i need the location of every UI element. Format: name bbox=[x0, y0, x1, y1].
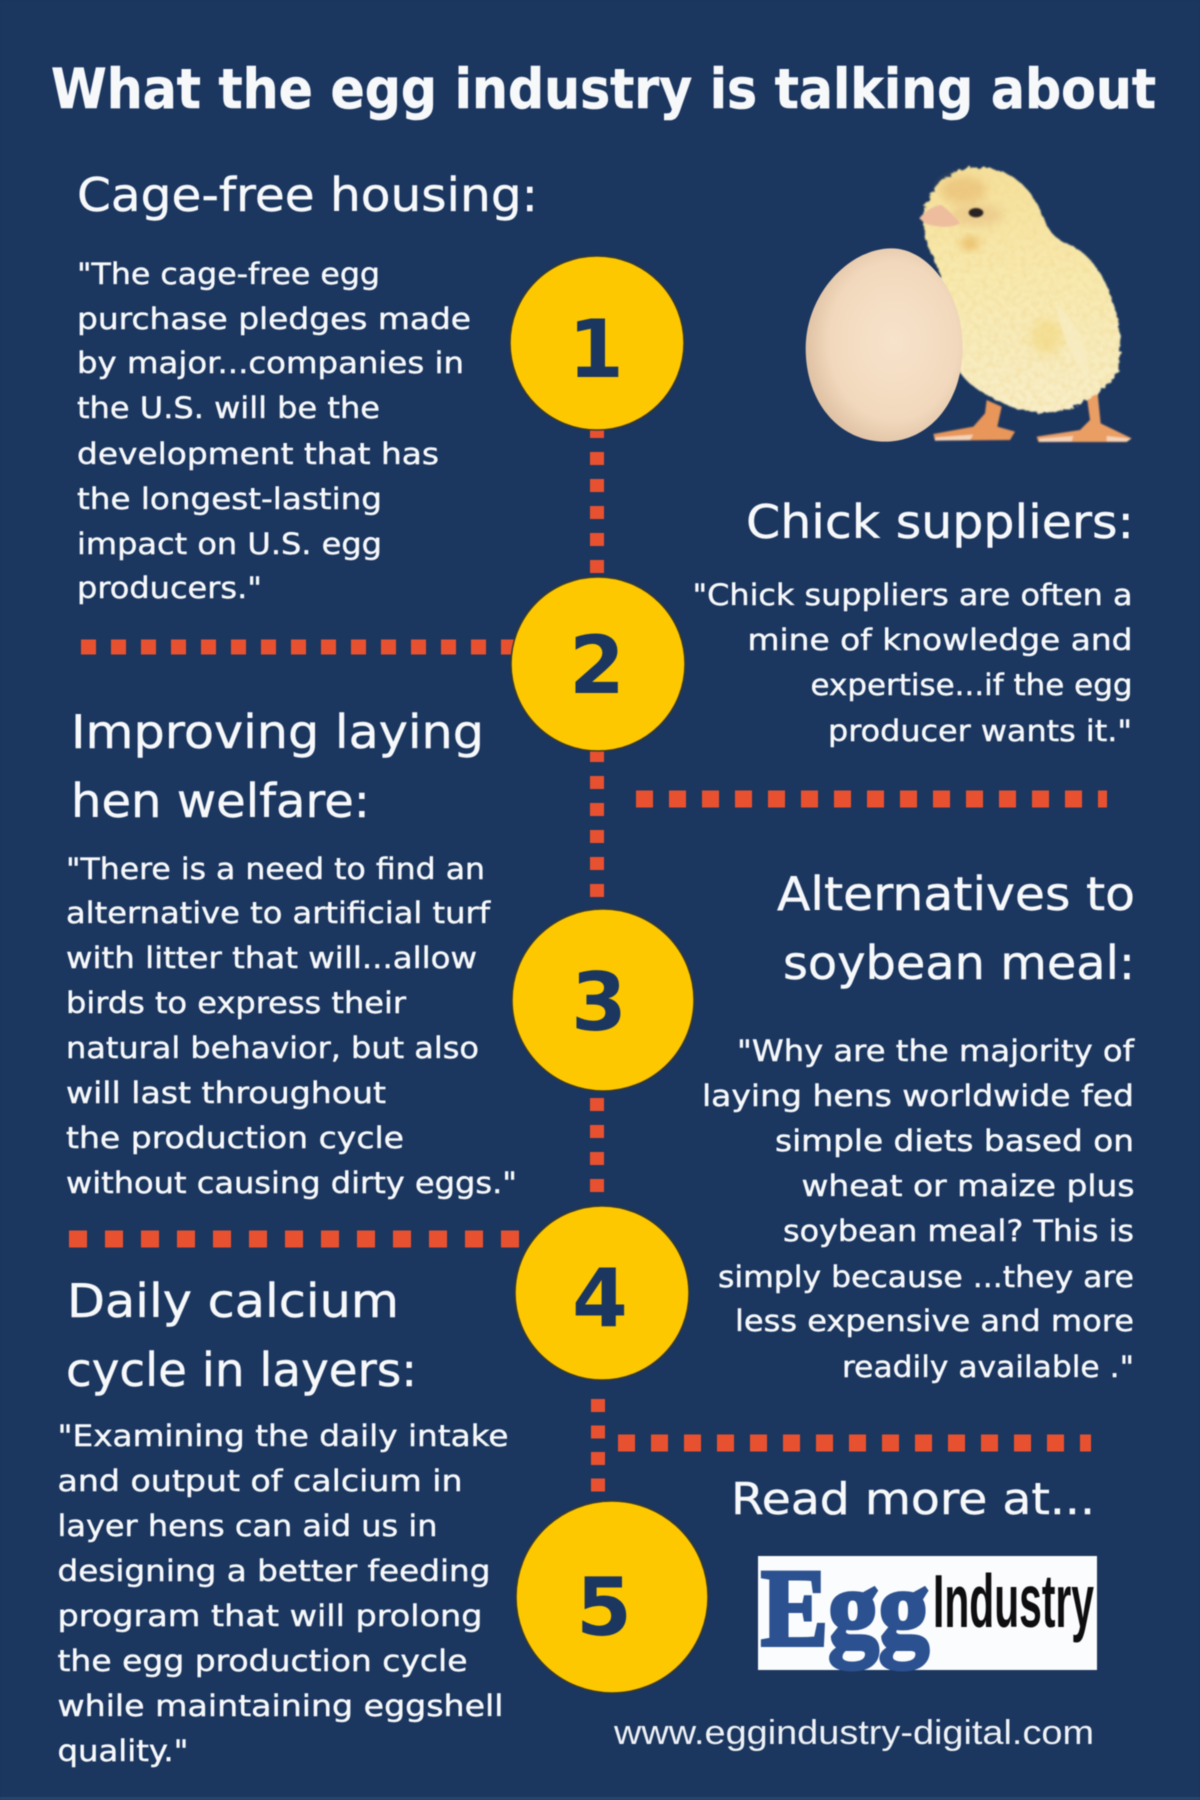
chick beak bbox=[919, 205, 960, 227]
quote: improving laying hen welfare: without causing dirty eggs." bbox=[66, 1166, 517, 1200]
quote: improving laying hen welfare: birds to express their bbox=[66, 986, 406, 1020]
heading: alternatives to soybean meal: soybean meal: bbox=[783, 936, 1135, 990]
quote: cage-free housing: development that has bbox=[77, 437, 439, 471]
quote: daily calcium cycle in layers: quality." bbox=[58, 1734, 188, 1768]
quote: cage-free housing: by major...companies in bbox=[77, 346, 464, 380]
egg bbox=[806, 248, 963, 442]
quote: daily calcium cycle in layers: program that will prolong bbox=[58, 1599, 482, 1633]
website link: www.eggindustry-digital.com bbox=[613, 1714, 1094, 1752]
number badge 1 bbox=[510, 256, 684, 430]
number badge 5: 5 bbox=[576, 1561, 632, 1654]
quote: daily calcium cycle in layers: "Examining the daily intake bbox=[58, 1419, 508, 1453]
quote: daily calcium cycle in layers bbox=[58, 1419, 508, 1768]
heading: cage-free housing: Cage-free housing: bbox=[77, 168, 538, 222]
quote: chick suppliers: expertise...if the egg bbox=[810, 668, 1132, 702]
quote: alternatives to soybean meal bbox=[702, 1034, 1135, 1384]
number badge 2 bbox=[511, 577, 685, 751]
quote: alternatives to soybean meal: simple diets based on bbox=[775, 1124, 1134, 1158]
quote: daily calcium cycle in layers: the egg production cycle bbox=[58, 1644, 468, 1678]
quote: alternatives to soybean meal: less expensive and more bbox=[735, 1304, 1134, 1338]
quote: alternatives to soybean meal: "Why are the majority of bbox=[737, 1034, 1135, 1068]
heading: alternatives to soybean meal bbox=[777, 867, 1135, 990]
panel: chick suppliers bbox=[692, 495, 1134, 748]
number badge 4 bbox=[515, 1206, 689, 1380]
quote: improving laying hen welfare: will last throughout bbox=[66, 1076, 386, 1110]
quote: improving laying hen welfare: the production cycle bbox=[66, 1121, 404, 1155]
number badge 4: 4 bbox=[572, 1252, 628, 1345]
vertical dotted connector bbox=[597, 425, 598, 1492]
quote: daily calcium cycle in layers: and output of calcium in bbox=[58, 1464, 462, 1498]
chick shading bbox=[940, 177, 1088, 380]
heading: daily calcium cycle in layers: Daily calcium bbox=[67, 1274, 399, 1328]
icon: chick and egg bbox=[806, 167, 1132, 442]
quote: cage-free housing bbox=[77, 257, 471, 605]
quote: chick suppliers: "Chick suppliers are often a bbox=[692, 578, 1132, 612]
quote: improving laying hen welfare: "There is a need to find an bbox=[66, 852, 485, 886]
logo: Egg Industry: Egg bbox=[761, 1547, 929, 1669]
quote: cage-free housing: producers." bbox=[77, 571, 262, 605]
chick legs and feet bbox=[933, 383, 1132, 442]
number badge 3 bbox=[512, 909, 694, 1091]
number badge 3: 3 bbox=[571, 956, 627, 1049]
heading: improving laying hen welfare bbox=[71, 705, 484, 828]
quote: daily calcium cycle in layers: while maintaining eggshell bbox=[58, 1689, 504, 1723]
quote: daily calcium cycle in layers: layer hens can aid us in bbox=[58, 1509, 438, 1543]
dotted divider: left, below item 3 bbox=[69, 1230, 520, 1248]
heading: improving laying hen welfare: hen welfare: bbox=[71, 774, 370, 828]
dotted divider: right, below item 4 bbox=[618, 1434, 1091, 1452]
quote: chick suppliers bbox=[692, 578, 1132, 748]
quote: alternatives to soybean meal: wheat or maize plus bbox=[802, 1169, 1134, 1203]
chick body bbox=[923, 167, 1120, 412]
bottom edge line bbox=[0, 1797, 1200, 1800]
quote: alternatives to soybean meal: soybean meal? This is bbox=[783, 1214, 1134, 1248]
number badge 1: 1 bbox=[568, 303, 624, 396]
dotted divider: right, below item 2 bbox=[636, 790, 1107, 808]
quote: cage-free housing: the longest-lasting bbox=[77, 482, 382, 516]
quote: cage-free housing: "The cage-free egg bbox=[77, 257, 380, 291]
quote: alternatives to soybean meal: laying hens worldwide fed bbox=[702, 1079, 1134, 1113]
number badge 5 bbox=[516, 1501, 708, 1693]
quote: improving laying hen welfare: natural behavior, but also bbox=[66, 1031, 479, 1065]
number badge 2: 2 bbox=[569, 619, 625, 712]
dotted divider: left, below item 1 bbox=[81, 640, 515, 654]
quote: chick suppliers: producer wants it." bbox=[828, 714, 1132, 748]
read more heading: Read more at... bbox=[731, 1474, 1095, 1525]
heading: alternatives to soybean meal: Alternatives to bbox=[777, 867, 1135, 921]
heading: daily calcium cycle in layers: cycle in layers: bbox=[66, 1343, 417, 1397]
quote: chick suppliers: mine of knowledge and bbox=[748, 623, 1132, 657]
chick eye bbox=[969, 208, 983, 217]
panel: improving laying hen welfare bbox=[66, 705, 517, 1200]
quote: alternatives to soybean meal: readily available ." bbox=[842, 1350, 1134, 1384]
heading: daily calcium cycle in layers bbox=[66, 1274, 417, 1397]
heading: chick suppliers: Chick suppliers: bbox=[746, 495, 1134, 549]
panel: cage-free housing bbox=[77, 168, 538, 605]
quote: cage-free housing: purchase pledges made bbox=[77, 302, 471, 336]
quote: cage-free housing: the U.S. will be the bbox=[77, 391, 380, 425]
heading: improving laying hen welfare: Improving laying bbox=[71, 705, 484, 759]
logo: Egg Industry bbox=[758, 1547, 1097, 1670]
quote: improving laying hen welfare: alternative to artificial turf bbox=[66, 896, 491, 930]
panel: alternatives to soybean meal bbox=[702, 867, 1135, 1384]
quote: improving laying hen welfare: with litter that will...allow bbox=[66, 941, 477, 975]
quote: alternatives to soybean meal: simply because ...they are bbox=[718, 1260, 1134, 1294]
quote: improving laying hen welfare bbox=[66, 852, 517, 1200]
quote: cage-free housing: impact on U.S. egg bbox=[77, 527, 382, 561]
panel: daily calcium cycle in layers bbox=[58, 1274, 508, 1768]
quote: daily calcium cycle in layers: designing a better feeding bbox=[58, 1554, 490, 1588]
